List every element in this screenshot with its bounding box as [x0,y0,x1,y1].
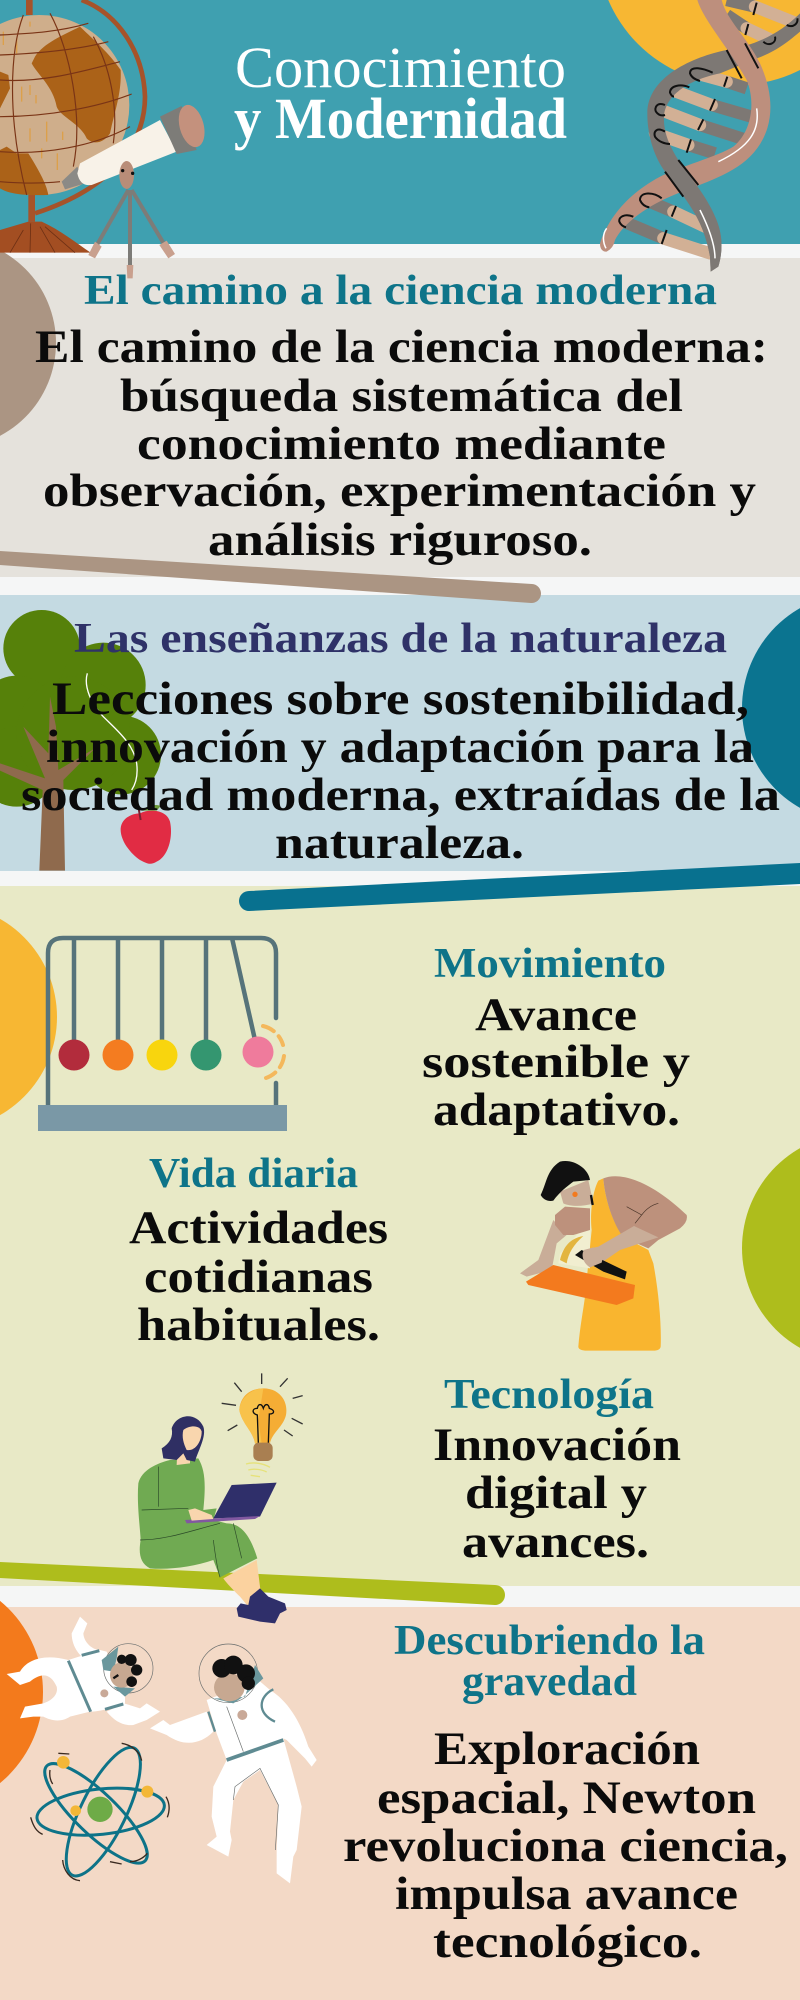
panel: header [0,0,800,278]
text block: movimiento: adaptativo. [433,1084,680,1136]
heading: el camino a la ciencia moderna: El camino a la ciencia moderna [84,268,717,314]
heading: descubriendo la gravedad [394,1618,705,1705]
decorative teal bar [239,863,800,911]
title: y Modernidad [234,86,567,151]
text block: el camino: observación, experimentación y [43,465,757,517]
heading: descubriendo la gravedad: gravedad [462,1659,637,1705]
decorative tan circle [0,238,56,448]
heading: descubriendo la gravedad: Descubriendo la [394,1618,705,1664]
panel: descubriendo la gravedad [0,1574,800,2000]
text block: vida diaria: cotidianas [144,1251,373,1303]
title [234,35,567,151]
text block: el camino: análisis riguroso. [208,514,592,566]
heading: movimiento: Movimiento [434,941,666,987]
icon: telescope [62,102,209,278]
heading: tecnología: Tecnología [444,1372,654,1418]
text block: vida diaria: Actividades [129,1202,388,1254]
panel background: pale green [0,886,800,1586]
text block: el camino: búsqueda sistemática del [120,370,683,422]
text block: el camino: El camino de la ciencia moderna: [35,321,768,373]
icon: large astronaut [150,1644,317,1883]
text block: movimiento [422,989,691,1136]
panel background: peach [0,1607,800,2000]
panel: el camino a la ciencia moderna [0,238,800,603]
panel: las enseñanzas de la naturaleza [0,593,800,911]
decorative lime circle [742,1133,800,1363]
panel background: light gray [0,258,800,577]
panel background: light blue [0,595,800,871]
text block: lecciones [21,673,780,869]
icon: small astronaut [7,1617,160,1725]
icon: newton's cradle [38,938,287,1131]
text block: exploración: revoluciona ciencia, [343,1820,788,1872]
decorative yellow circle [597,0,800,85]
text block: movimiento: sostenible y [422,1036,691,1088]
icon: dna helix [600,0,800,272]
icon: tree with apple [0,610,171,871]
header background: teal [0,0,800,244]
text block: movimiento: Avance [475,989,637,1041]
decorative orange circle [0,1574,43,1810]
decorative teal circle [742,593,800,823]
text block: tecnología: avances. [462,1516,649,1568]
text block: lecciones: innovación y adaptación para la [46,721,754,773]
text block: exploración: impulsa avance [395,1868,738,1920]
heading: las enseñanzas de la naturaleza: Las enseñanzas de la naturaleza [74,616,727,662]
text block: lecciones: Lecciones sobre sostenibilidad, [52,673,749,725]
decorative yellow circle [0,904,57,1130]
icon: woman with laptop [138,1416,287,1623]
text block: tecnología: digital y [465,1467,648,1519]
text block: tecnología: Innovación [433,1419,681,1471]
text block: el camino [35,321,768,566]
title: Conocimiento [235,35,566,100]
icon: globe [0,0,145,253]
icon: carpenter with hammer [520,1161,687,1351]
icon: light bulb [222,1373,303,1477]
heading: vida diaria: Vida diaria [149,1151,358,1197]
text block: vida diaria: habituales. [137,1299,380,1351]
text block: vida diaria [129,1202,388,1351]
text block: lecciones: naturaleza. [275,817,524,869]
text block: tecnología [433,1419,681,1568]
text block: exploración: tecnológico. [433,1916,702,1968]
text block: exploración: Exploración [434,1723,700,1775]
decorative tan bar [0,551,541,603]
icon: atom [31,1738,169,1885]
decorative lime bar [0,1562,505,1605]
text block: lecciones: sociedad moderna, extraídas de la [21,769,780,821]
icon: astronauts and atom [7,1617,317,1885]
text block: el camino: conocimiento mediante [137,418,666,470]
text block: exploración [343,1723,788,1968]
text block: exploración: espacial, Newton [377,1772,756,1824]
panel: movimiento, vida diaria y tecnología [0,886,800,1623]
